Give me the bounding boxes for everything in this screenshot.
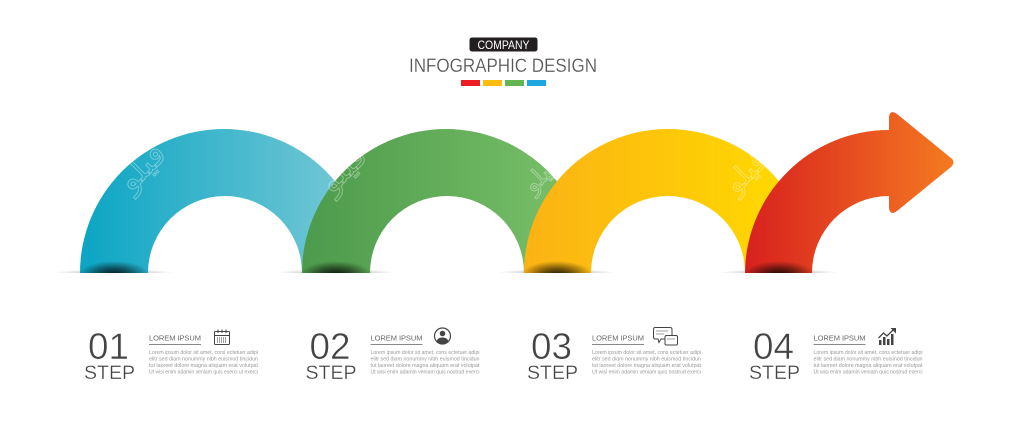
step number: 04 — [753, 326, 794, 367]
arrow: step 4 red — [743, 112, 954, 289]
step text: tut laoreet dolore magna aliquam erat volutpat — [149, 363, 258, 369]
step 3: STEP — [527, 362, 578, 384]
step text: tut laoreet dolore magna aliquam erat volutpat — [370, 363, 480, 369]
step text: Lorem ipsum dolor sit amet, cons ectetuer adipi — [592, 350, 701, 356]
step text: Lorem ipsum dolor sit amet, cons ectetuer adipi — [149, 350, 258, 356]
arc: step 3 yellow: فيلو — [517, 151, 565, 199]
step label: LOREM IPSUM — [592, 334, 644, 342]
step text: Lorem ipsum dolor sit amet, cons ectetuer adipi — [370, 350, 480, 356]
heading: INFOGRAPHIC DESIGN — [409, 56, 597, 77]
step 3 — [527, 326, 701, 384]
icon: chat bubbles — [654, 328, 678, 345]
step text — [592, 350, 701, 376]
arc: step 1 blue — [80, 129, 335, 273]
step 2: STEP — [306, 362, 356, 384]
step label: LOREM IPSUM — [814, 334, 866, 342]
step 1 — [84, 326, 258, 384]
step 1: STEP — [84, 362, 135, 384]
step label: LOREM IPSUM — [370, 334, 422, 342]
step label: LOREM IPSUM — [149, 334, 201, 342]
step text: Ut wisi enim adamin veniam quis nostrud exerci — [592, 370, 701, 376]
colour key — [461, 80, 546, 86]
arc: step 2 green: فيلو — [309, 137, 374, 202]
step text: tut laoreet dolore magna aliquam erat volutpat — [814, 363, 923, 369]
company badge: COMPANY — [478, 38, 530, 52]
step text: elitr sed diam nonummy nibh euismod tincidun — [149, 356, 258, 362]
step text: Ut wisi enim adamin veniam quis exerci ut exerci — [149, 370, 258, 376]
step number: 02 — [310, 326, 350, 367]
step number: 01 — [88, 326, 129, 367]
step text — [814, 350, 923, 376]
arc: step 3 yellow — [523, 129, 779, 273]
arc: step 2 green — [302, 129, 557, 273]
step 4 — [749, 326, 923, 384]
step text — [370, 350, 480, 376]
step text: Ut wisi enim adamin veniam quis nostrud exerci — [814, 370, 922, 376]
step text: Ut wisi enim adamin veniam quis nostrud exerci — [370, 370, 480, 376]
title block — [409, 38, 597, 86]
step text: tut laoreet dolore magna aliquam erat volutpat — [592, 363, 701, 369]
step number: 03 — [531, 326, 572, 367]
step text — [149, 350, 258, 376]
step text: Lorem ipsum dolor sit amet, cons ectetuer adipi — [814, 350, 922, 356]
icon: person — [434, 328, 450, 344]
step text: elitr sed diam nonummy nibh euismod tincidun — [814, 356, 922, 362]
step 2 — [306, 326, 480, 384]
step 4: STEP — [749, 362, 800, 384]
step text: elitr sed diam nonummy nibh euismod tincidun — [370, 356, 480, 362]
icon: growth chart — [878, 328, 896, 345]
arc: step 3 yellow: فيلو — [716, 144, 773, 201]
step text: elitr sed diam nonummy nibh euismod tincidun — [592, 356, 701, 362]
arc: step 1 blue: فيلو — [108, 135, 173, 200]
icon: calendar — [214, 330, 230, 344]
ground shadows — [60, 270, 833, 273]
